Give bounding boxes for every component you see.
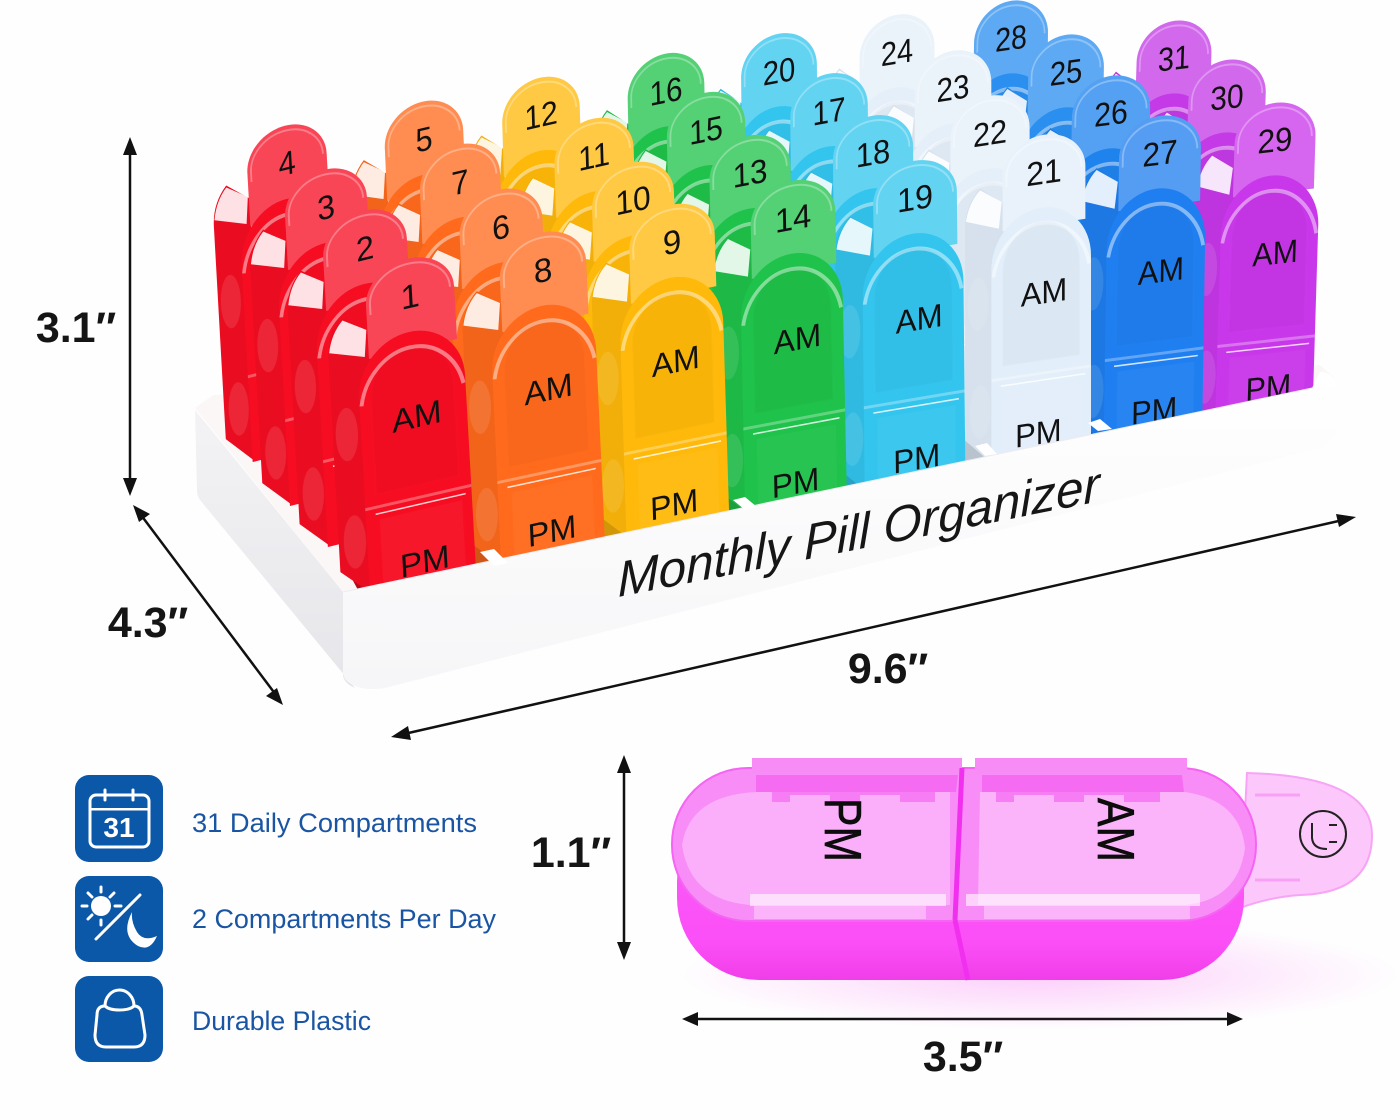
pill 29 — [1185, 98, 1322, 453]
pill 22 — [914, 89, 1035, 441]
pill 30: 30 — [1210, 76, 1244, 118]
pill 21: PM — [1015, 411, 1062, 455]
pill 31: 31 — [1157, 38, 1191, 79]
pill 18 — [796, 108, 922, 462]
pill 26 — [1032, 70, 1156, 419]
pill 9 — [586, 195, 730, 563]
pill 2 — [283, 199, 429, 563]
capsule: single pill box — [672, 758, 1400, 1030]
feature: 31 daily compartments: 31 Daily Compartments — [192, 808, 477, 838]
pill 31 — [1094, 16, 1218, 362]
pill 27: AM — [1138, 249, 1184, 292]
pill 2: 2 — [355, 229, 375, 270]
feature: 2 compartments per day — [75, 876, 496, 962]
pill 14 — [708, 172, 847, 538]
pill 17: 17 — [812, 89, 846, 133]
pill 27: PM — [1131, 389, 1177, 432]
dimension: height 3.1 — [36, 137, 137, 496]
pill 29: AM — [1252, 233, 1299, 274]
pill 24 — [826, 8, 940, 360]
pill 12 — [466, 68, 594, 428]
pill 11 — [517, 109, 648, 469]
pill 15: 15 — [689, 108, 723, 152]
pill 3: 3 — [316, 186, 336, 228]
pill 8: AM — [523, 365, 574, 412]
tray label: Monthly Pill Organizer — [617, 456, 1103, 608]
feature: 2 compartments per day: 2 Compartments Per Day — [192, 904, 496, 934]
capsule labels — [813, 798, 1144, 862]
pill 28 — [936, 0, 1054, 344]
pill 29: PM — [1245, 367, 1292, 408]
capsule lower body — [677, 800, 1244, 980]
pill 16: 16 — [649, 69, 683, 113]
dimension: depth 4.3: 4.3″ — [108, 599, 188, 647]
feature: durable plastic: Durable Plastic — [192, 1006, 371, 1036]
pill 19: 19 — [897, 176, 933, 220]
pill 21 — [961, 128, 1091, 488]
tray front wall — [343, 372, 1337, 689]
pill 19 — [831, 153, 966, 516]
pill 19: PM — [893, 436, 940, 481]
icon: sun and moon — [75, 876, 163, 962]
capsule labels: AM — [1086, 798, 1144, 862]
dimension: capsule length 3.5: 3.5″ — [923, 1033, 1003, 1081]
icon: calendar: 31 — [103, 812, 135, 843]
dimension: height 3.1: 3.1″ — [36, 304, 116, 352]
pill 13 — [672, 127, 802, 484]
pill 22: 22 — [973, 112, 1007, 155]
pill 6: 6 — [491, 208, 511, 249]
pill 21: 21 — [1026, 151, 1062, 194]
pill 17 — [755, 66, 876, 420]
pill 11: 11 — [578, 134, 610, 178]
pill 4 — [209, 114, 349, 478]
dimension: depth 4.3 — [108, 505, 283, 705]
pill 26: 26 — [1094, 92, 1128, 134]
pill 24: 24 — [881, 31, 913, 74]
pill 7 — [382, 134, 519, 496]
capsule labels: PM — [813, 798, 871, 862]
pill 6 — [420, 179, 562, 541]
pill 8 — [455, 222, 606, 592]
pill 10 — [554, 153, 689, 513]
pill 8: 8 — [533, 250, 553, 292]
pill 1: AM — [391, 393, 443, 441]
pill 9: AM — [651, 339, 700, 384]
pill 20 — [706, 26, 825, 380]
pill grid — [209, 0, 1322, 611]
pill 27 — [1074, 110, 1207, 467]
tray base — [195, 365, 1334, 688]
pill 18: 18 — [856, 132, 890, 175]
pill 29: 29 — [1257, 120, 1293, 161]
capsule lid — [672, 758, 1256, 980]
pill 10: 10 — [615, 178, 651, 223]
pill 14: 14 — [775, 197, 812, 241]
pill 9: 9 — [662, 223, 682, 264]
pill 21: AM — [1021, 270, 1067, 314]
pill 1: PM — [399, 538, 451, 586]
pill 5 — [348, 91, 482, 453]
capsule tab — [1240, 773, 1372, 908]
pill 5: 5 — [415, 119, 433, 160]
pill 14: AM — [773, 316, 822, 361]
pill 9: PM — [650, 482, 699, 528]
pill 15 — [630, 84, 757, 441]
pill 20: 20 — [763, 49, 795, 93]
icon: calendar — [75, 775, 163, 862]
pill 23 — [880, 44, 996, 396]
pill 28: 28 — [995, 18, 1027, 60]
pill 30 — [1144, 55, 1272, 401]
pill 3 — [246, 158, 389, 522]
icon: bag — [75, 976, 163, 1062]
pill 8: PM — [527, 507, 577, 554]
pill 23: 23 — [937, 67, 969, 110]
pill 14: PM — [771, 460, 820, 505]
pill 1: 1 — [400, 276, 421, 318]
pill 25 — [989, 29, 1110, 378]
pill 13: 13 — [732, 151, 768, 195]
dimension: length 9.6: 9.6″ — [848, 645, 928, 693]
pill 25: 25 — [1049, 52, 1083, 93]
feature: 31 daily compartments — [75, 775, 477, 862]
pill 4: 4 — [277, 143, 297, 184]
dimension: capsule height 1.1 — [531, 755, 631, 960]
dimension: capsule length 3.5 — [682, 1012, 1243, 1081]
pill 16 — [592, 45, 716, 402]
pill 1 — [324, 247, 477, 611]
pill 12: 12 — [524, 93, 558, 138]
pill 7: 7 — [451, 162, 469, 203]
dimension: length 9.6 — [391, 514, 1356, 740]
feature: durable plastic — [75, 976, 371, 1062]
pill 19: AM — [895, 297, 943, 341]
pill 27: 27 — [1142, 132, 1178, 174]
dimension: capsule height 1.1: 1.1″ — [531, 829, 611, 877]
